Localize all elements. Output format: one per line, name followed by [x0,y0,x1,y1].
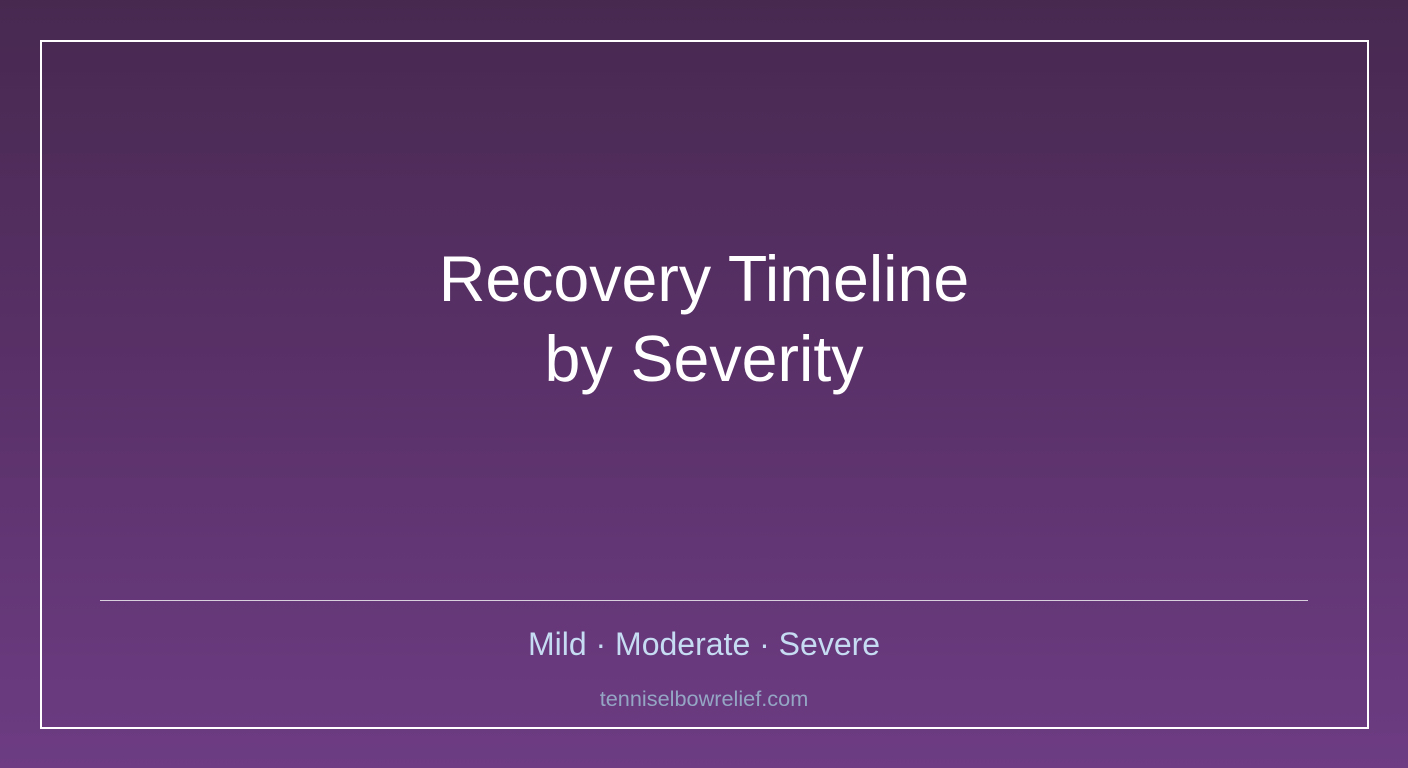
title: Recovery Timeline [439,243,969,315]
source url: tenniselbowrelief.com [600,686,808,711]
title [439,243,969,395]
subtitle: severity levels: Mild · Moderate · Severe [528,626,880,662]
title: by Severity [544,323,864,395]
